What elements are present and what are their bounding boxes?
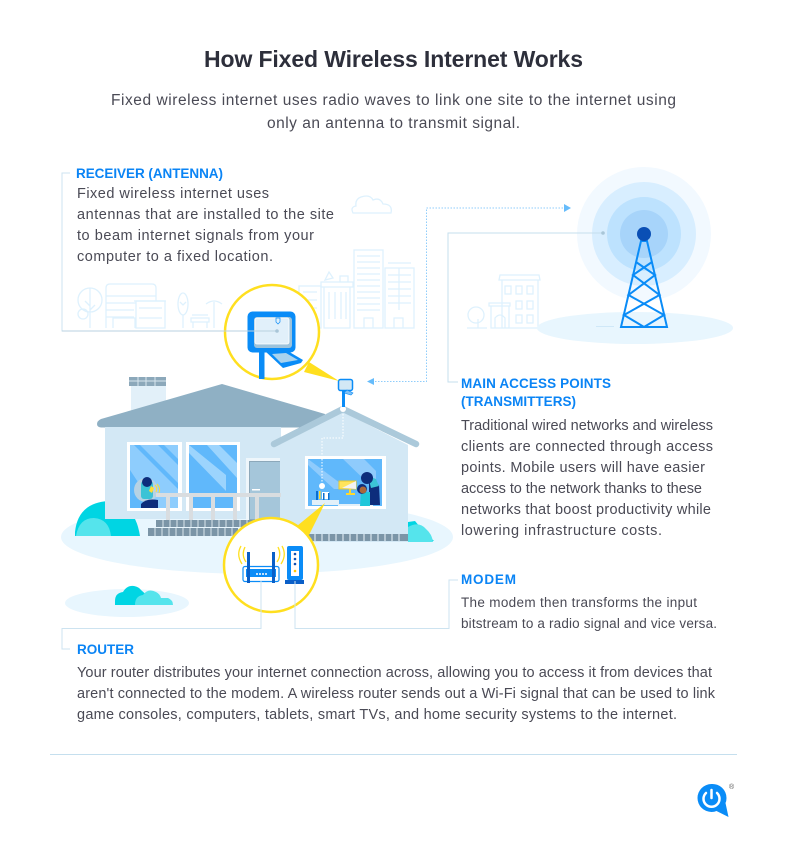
text block: receiver: to beam internet signals from your xyxy=(77,228,314,244)
text block: modem: The modem then transforms the input xyxy=(461,595,697,610)
left bush xyxy=(75,501,140,536)
porch steps xyxy=(148,520,256,536)
ground ellipse xyxy=(61,500,453,574)
background cloud xyxy=(352,196,391,213)
signal waves around tower xyxy=(577,167,711,301)
house left window xyxy=(127,442,182,511)
text block: modem: bitstream to a radio signal and vice versa. xyxy=(461,616,717,631)
text block: main access points: points. Mobile users will have easier xyxy=(461,460,705,476)
dotted cable inside house xyxy=(319,406,346,489)
right bush xyxy=(408,521,434,542)
transmission tower xyxy=(596,227,667,327)
small ground with cloud xyxy=(65,586,189,617)
text block: receiver: computer to a fixed location. xyxy=(77,249,273,265)
text block: main access points xyxy=(461,376,713,539)
text block: router: ROUTER xyxy=(77,642,134,657)
text block: receiver xyxy=(76,166,334,265)
house main body xyxy=(105,427,281,519)
text block: receiver: Fixed wireless internet uses xyxy=(77,186,269,202)
text block: main access points: Traditional wired networks and wireless xyxy=(461,418,713,434)
text block: receiver: antennas that are installed to the site xyxy=(77,207,334,223)
logo xyxy=(698,783,735,817)
callout: router and modem magnified xyxy=(224,518,318,612)
extension gable roof xyxy=(274,409,416,444)
background city skyline xyxy=(78,250,414,328)
text block: router: game consoles, computers, tablets, smart TVs, and home security systems to the internet. xyxy=(77,707,677,723)
text block: main access points: access to the network thanks to these xyxy=(461,481,702,497)
intro text: only an antenna to transmit signal. xyxy=(267,115,520,132)
text block: main access points: clients are connected through access xyxy=(461,439,713,455)
text block: receiver: RECEIVER (ANTENNA) xyxy=(76,166,223,181)
house middle window xyxy=(186,442,240,511)
text block: main access points: (TRANSMITTERS) xyxy=(461,394,576,409)
text block: router: Your router distributes your internet connection across, allowing you to access it from devices that xyxy=(77,665,712,681)
background buildings near tower xyxy=(467,275,540,328)
house main roof xyxy=(97,384,325,428)
foundation strip xyxy=(308,534,408,541)
footer divider xyxy=(50,754,737,755)
callout pointer to rooftop antenna xyxy=(304,362,339,381)
title: How Fixed Wireless Internet Works xyxy=(204,46,583,72)
ground under tower xyxy=(537,312,733,344)
text block: main access points: networks that boost productivity while xyxy=(461,502,711,518)
small router in window xyxy=(316,491,330,500)
rooftop antenna xyxy=(338,380,353,407)
leader line: router xyxy=(62,581,261,649)
text block: modem: MODEM xyxy=(461,572,516,587)
front door xyxy=(246,458,280,520)
leader line: receiver xyxy=(62,173,279,333)
porch railing xyxy=(156,493,282,521)
extension window xyxy=(305,456,386,509)
text block: router: aren't connected to the modem. A wireless router sends out a Wi-Fi signal that can be used to link xyxy=(77,686,716,702)
callout: antenna magnified xyxy=(62,285,319,379)
leader line: modem xyxy=(295,580,458,628)
text block: main access points: lowering infrastructure costs. xyxy=(461,523,662,539)
text block: modem xyxy=(461,572,717,631)
text block: main access points: MAIN ACCESS POINTS xyxy=(461,376,611,391)
leader line: access points xyxy=(448,231,605,382)
dotted signal arrow xyxy=(367,204,571,385)
logo: ® xyxy=(729,783,735,791)
person with phone in left window xyxy=(134,477,160,508)
callout pointer to router xyxy=(297,503,325,535)
intro text: Fixed wireless internet uses radio waves to link one site to the internet using xyxy=(111,92,676,109)
text block: router xyxy=(77,642,716,723)
chimney xyxy=(129,377,166,417)
people at computer in window xyxy=(339,472,380,506)
intro text xyxy=(111,92,676,132)
house front extension xyxy=(281,412,408,542)
